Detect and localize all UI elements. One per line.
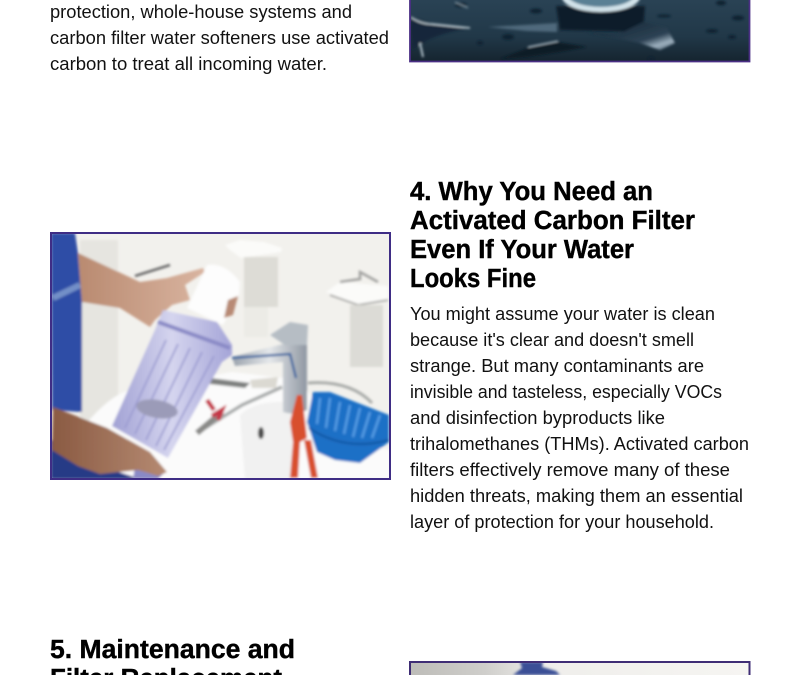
photo: technician holding a transparent filter housing over a sink	[51, 233, 390, 479]
red wrench	[290, 395, 307, 478]
heading: section 4: Activated Carbon Filter	[410, 207, 695, 235]
text block: section 4 body: trihalomethanes (THMs). Activated carbon	[410, 434, 749, 454]
text block: section 3 closing paragraph	[50, 2, 389, 74]
text block: section 4 body	[410, 304, 749, 532]
blue filter cap	[307, 392, 389, 463]
text block: section 4 body: because it's clear and doesn't smell	[410, 330, 694, 350]
upper arm and hand	[78, 253, 205, 327]
heading: section 5	[50, 636, 295, 675]
photo: glass of water with spilled water on a dark surface	[410, 0, 750, 62]
cartridge	[187, 265, 240, 325]
lower arm and hand	[52, 407, 167, 476]
heading: section 4: Looks Fine	[410, 265, 536, 293]
text block: section 3 closing paragraph: carbon filter water softeners use activated	[50, 28, 389, 48]
wall holders	[228, 240, 281, 257]
sink	[85, 372, 390, 479]
valve	[197, 412, 222, 433]
heading: section 4: 4. Why You Need an	[410, 178, 653, 206]
text block: section 4 body: filters effectively remove many of these	[410, 460, 730, 480]
flexible hose	[205, 387, 282, 428]
photo: top edge of section 5 image	[410, 662, 750, 675]
text block: section 4 body: strange. But many contaminants are	[410, 356, 704, 376]
shirt	[51, 233, 82, 412]
heading: section 5: 5. Maintenance and	[50, 636, 295, 664]
faucet	[232, 344, 307, 414]
text block: section 4 body: and disinfection byproducts like	[410, 408, 665, 428]
heading: section 4: Even If Your Water	[410, 236, 634, 264]
filter housing	[112, 310, 232, 458]
text block: section 4 body: hidden threats, making them an essential	[410, 486, 743, 506]
text block: section 3 closing paragraph: carbon to treat all incoming water.	[50, 54, 327, 74]
text block: section 4 body: You might assume your water is clean	[410, 304, 715, 324]
heading: section 4	[410, 178, 695, 293]
text block: section 4 body: invisible and tasteless, especially VOCs	[410, 382, 722, 402]
text block: section 4 body: layer of protection for your household.	[410, 512, 714, 532]
text block: section 3 closing paragraph: protection, whole-house systems and	[50, 2, 352, 22]
